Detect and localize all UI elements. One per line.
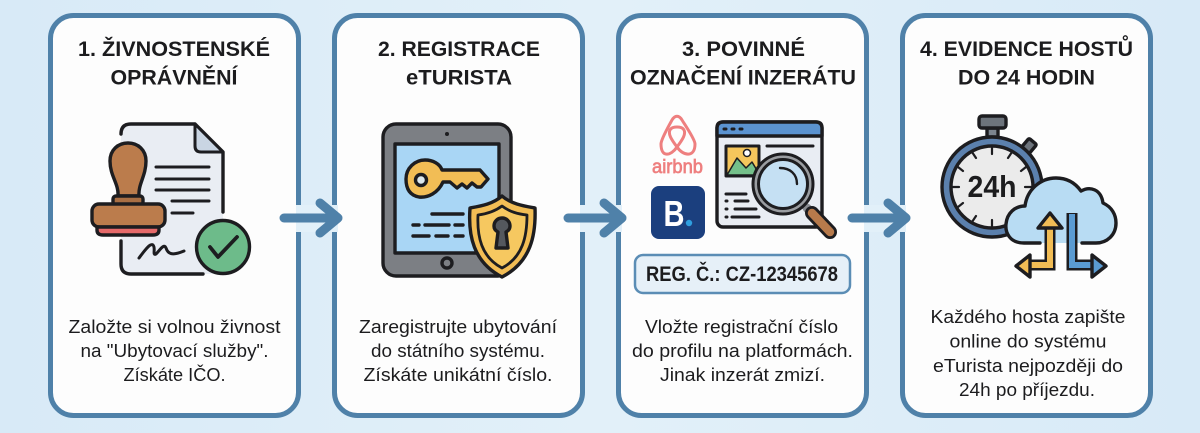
panel: step 1	[50, 16, 298, 416]
icon: cloud with arrows	[1006, 178, 1116, 277]
text: step 3	[632, 316, 853, 385]
text: step 4: online do systému	[950, 330, 1106, 352]
heading: step 1	[78, 36, 270, 90]
text: step 1: Založte si volnou živnost	[68, 316, 280, 337]
text: step 1: Získáte IČO.	[124, 364, 226, 385]
heading: step 3: OZNAČENÍ INZERÁTU	[630, 64, 856, 90]
heading: step 2	[378, 37, 540, 90]
text: step 2: do státního systému.	[371, 340, 545, 361]
text: step 1: na "Ubytovací služby".	[80, 340, 268, 361]
icon: tablet with key and shield	[383, 124, 535, 277]
icon: stopwatch	[942, 116, 1042, 237]
text: step 2: Získáte unikátní číslo.	[364, 364, 552, 385]
heading: step 1: 1. ŽIVNOSTENSKÉ	[78, 36, 270, 61]
registration number badge: REG. Č.: CZ-12345678	[646, 262, 838, 286]
heading: step 3	[630, 36, 856, 90]
icon: booking logo: B	[664, 193, 684, 234]
arrow: step 3 to 4	[852, 203, 906, 233]
icon: booking logo	[651, 186, 705, 239]
arrow: step 2 to 3	[568, 203, 622, 233]
heading: step 2: eTURISTA	[406, 66, 512, 90]
heading: step 4: DO 24 HODIN	[958, 66, 1095, 90]
text: step 3: do profilu na platformách.	[632, 340, 853, 361]
text: step 2	[359, 316, 558, 385]
text: step 4: eTurista nejpozději do	[933, 355, 1123, 376]
panel: step 4	[902, 16, 1150, 416]
heading: step 2: 2. REGISTRACE	[378, 37, 540, 61]
text: step 2: Zaregistrujte ubytování	[359, 316, 558, 337]
icon: airbnb logo: airbnb	[652, 157, 703, 178]
text: step 4	[930, 306, 1126, 400]
text: step 4: 24h po příjezdu.	[959, 379, 1095, 400]
heading: step 1: OPRÁVNĚNÍ	[110, 64, 239, 90]
heading: step 4: 4. EVIDENCE HOSTŮ	[920, 33, 1133, 61]
panel: step 2	[334, 16, 582, 416]
registration number badge	[635, 255, 850, 293]
icon: stamped document	[92, 124, 250, 274]
icon: browser with magnifier	[717, 122, 830, 232]
heading: step 3: 3. POVINNÉ	[682, 36, 805, 61]
icon: airbnb logo	[652, 116, 703, 178]
icon: stopwatch: 24h	[968, 169, 1016, 204]
text: step 4: Každého hosta zapište	[930, 306, 1126, 327]
text: step 3: Jinak inzerát zmizí.	[660, 364, 825, 385]
panel: step 3	[618, 16, 866, 416]
text: step 1	[68, 316, 280, 385]
arrow: step 1 to 2	[284, 203, 338, 233]
heading: step 4	[920, 33, 1133, 90]
text: step 3: Vložte registrační číslo	[645, 316, 838, 337]
